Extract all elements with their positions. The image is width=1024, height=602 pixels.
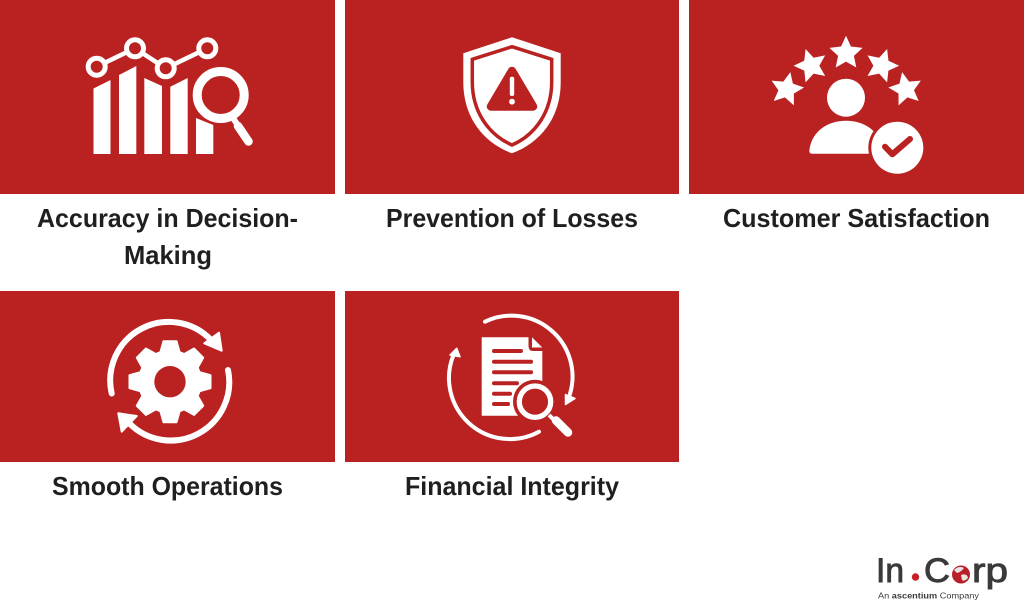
- panel: prevention of losses: [345, 0, 679, 194]
- logo: InCorp: An ascentium Company: [878, 590, 980, 600]
- logo: InCorp: rp: [972, 552, 1008, 590]
- icon: gear with circular arrows: [110, 322, 229, 441]
- panel: accuracy in decision-making: [0, 0, 335, 194]
- panel: smooth operations: [0, 291, 335, 462]
- heading: prevention of losses: Prevention of Losses: [386, 203, 638, 233]
- panel: customer satisfaction: [689, 0, 1024, 194]
- heading: financial integrity: Financial Integrity: [405, 471, 620, 501]
- heading: customer satisfaction: Customer Satisfaction: [723, 203, 990, 233]
- panel: financial integrity: [345, 291, 679, 462]
- heading: accuracy in decision-making: [37, 203, 298, 270]
- icon: customer with stars and check: [768, 36, 926, 177]
- heading: smooth operations: Smooth Operations: [52, 471, 283, 501]
- icon: document with magnifier and arrows: [449, 316, 575, 439]
- logo: InCorp: In: [876, 552, 904, 590]
- icon: bar chart with magnifier: [88, 40, 251, 154]
- logo: InCorp: [876, 552, 1008, 600]
- heading: accuracy in decision-making: Accuracy in Decision-: [37, 203, 298, 233]
- icon: shield with warning: [463, 37, 561, 153]
- heading: accuracy in decision-making: Making: [124, 240, 212, 270]
- logo: InCorp: C: [924, 552, 950, 590]
